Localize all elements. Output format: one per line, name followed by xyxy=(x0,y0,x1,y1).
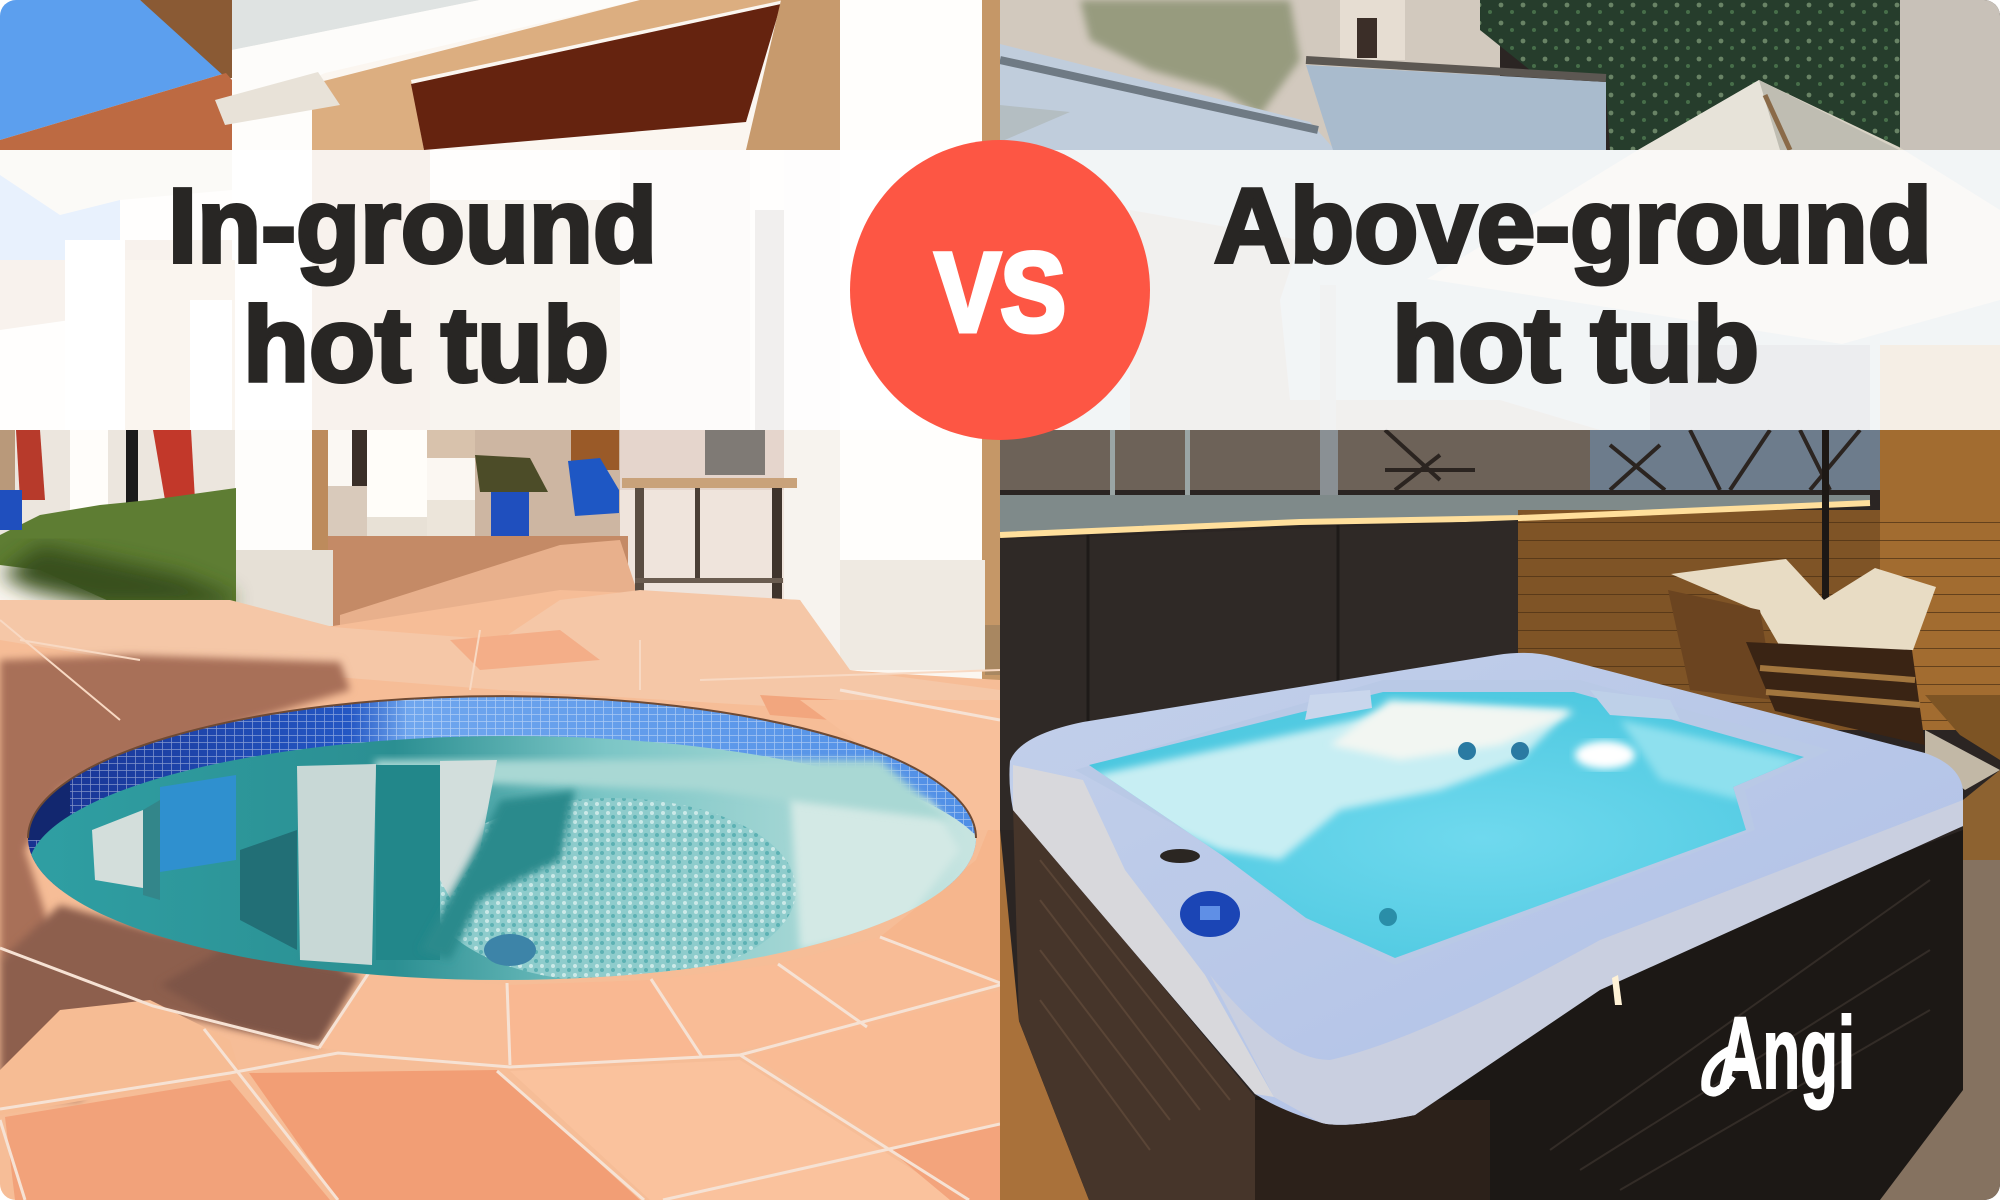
water xyxy=(31,736,976,980)
left photo: in-ground hot tub xyxy=(0,0,1000,1200)
window xyxy=(1340,0,1405,60)
foam jets xyxy=(1095,700,1800,926)
control panel xyxy=(1180,891,1240,937)
Angi logo xyxy=(1706,996,1855,1110)
wicker panel xyxy=(1086,520,1518,722)
lower lip highlight xyxy=(1210,800,1963,1125)
vs badge: VS xyxy=(935,230,1066,355)
skimmer xyxy=(484,934,536,966)
stone wall xyxy=(1000,430,1590,490)
umbrella xyxy=(1638,80,2000,430)
in-ground tub xyxy=(27,695,977,980)
upper rim shadow xyxy=(28,696,976,838)
building wall xyxy=(1000,0,1500,150)
tub cabinet xyxy=(1013,807,1963,1200)
shrub xyxy=(0,488,236,606)
glint xyxy=(1612,975,1622,1005)
right pole xyxy=(1822,430,1829,600)
railing xyxy=(1110,430,1338,495)
headrests xyxy=(1305,690,1372,720)
water xyxy=(1089,692,1804,958)
trees xyxy=(1480,0,1900,150)
tub dark fitting xyxy=(1160,849,1200,863)
roof eave xyxy=(140,0,232,78)
roof tiles xyxy=(0,73,232,150)
heading: above-ground hot tub: Above-ground xyxy=(1214,167,1932,285)
heading: above-ground hot tub: hot tub xyxy=(1392,286,1759,404)
patio floor xyxy=(0,590,1000,1200)
patio furniture xyxy=(1668,559,2000,790)
inner trim xyxy=(1075,680,1830,965)
acrylic shell xyxy=(1009,653,1963,1125)
heading: in-ground hot tub: In-ground xyxy=(168,167,657,285)
vs badge xyxy=(850,140,1150,440)
gravel floor xyxy=(428,798,796,982)
pool deck ledge xyxy=(1000,495,1870,535)
translucent banner xyxy=(0,150,2000,430)
lounge chairs xyxy=(1385,430,1860,490)
heading: above-ground hot tub xyxy=(1214,167,1932,404)
sky xyxy=(0,0,226,260)
LED strip xyxy=(1000,503,1870,535)
Angi logo: Angi xyxy=(1718,996,1855,1110)
distant colonnade behind banner xyxy=(0,150,784,430)
far wall xyxy=(1900,0,2000,150)
right photo: above-ground hot tub xyxy=(1000,0,2000,1200)
heading: in-ground hot tub xyxy=(168,167,657,404)
wall behind banner xyxy=(1000,150,2000,430)
blue pot and chair xyxy=(475,455,619,536)
wooden deck xyxy=(1000,770,2000,1200)
upper wall and beam xyxy=(215,0,1000,690)
heading: in-ground hot tub: hot tub xyxy=(243,286,609,404)
wooden wall xyxy=(1518,430,2000,730)
patio tiles xyxy=(0,620,1000,1200)
reflections xyxy=(160,775,236,872)
pillar bases xyxy=(233,550,1000,675)
blue-grey walls xyxy=(1000,44,1606,150)
climbing plants xyxy=(1080,0,1300,115)
back porch below banner xyxy=(0,430,784,626)
side table xyxy=(622,430,797,600)
mosaic band xyxy=(20,690,990,890)
